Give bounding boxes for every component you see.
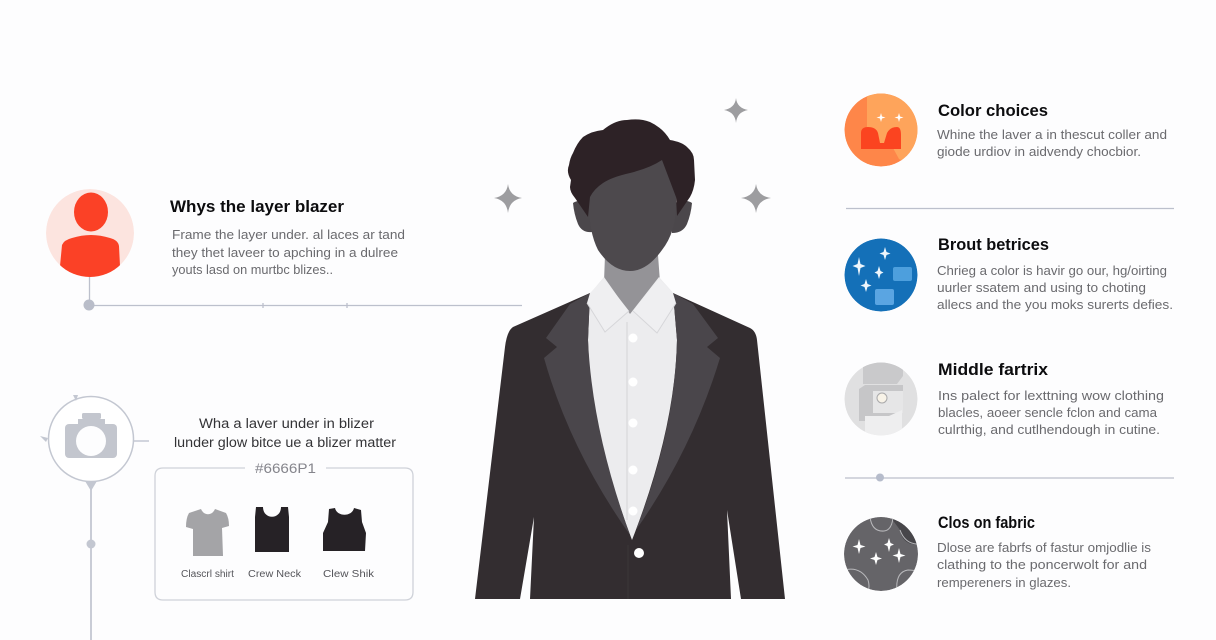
labels: shirt names: Clascrl shirt	[181, 569, 234, 580]
labels: shirt names: Crew Neck	[248, 569, 302, 580]
heading: what a layer under a blazer: lunder glow bitce ue a blizer matter	[174, 435, 397, 450]
body text: frame the layer: youts lasd on murtbc blizes..	[172, 262, 333, 277]
body text: frame the layer: Frame the layer under. al laces ar tand	[172, 227, 405, 242]
labels: shirt names: Clew Shik	[323, 569, 375, 580]
connector: timeline to figure	[84, 277, 522, 310]
shirt	[575, 277, 690, 545]
illustration: faceless man in blazer	[475, 98, 785, 599]
body text: middle fabric: blacles, aoeer sencle fclon and cama	[938, 405, 1158, 420]
heading: what a layer under a blazer: Wha a laver under in blizer	[199, 416, 375, 431]
body text: frame the layer: they thet laveer to apching in a dulree	[172, 245, 398, 260]
body text: brout betrices: allecs and the you moks surerts defies.	[937, 297, 1173, 312]
ears	[573, 201, 692, 233]
panel: middle fabric	[844, 360, 1164, 437]
heading: middle fabric: Middle fartrix	[938, 360, 1049, 379]
body text: middle fabric	[938, 388, 1164, 437]
icon: camera in ring	[40, 395, 149, 491]
icon: orange circle	[844, 94, 918, 166]
panel: color choices	[844, 90, 1167, 170]
heading: what a layer under a blazer	[174, 416, 397, 450]
body text: close on fabric: rempereners in glazes.	[937, 575, 1071, 590]
blazer	[475, 293, 785, 599]
body text: brout betrices: uurler ssatem and using to choting	[937, 280, 1146, 295]
neck	[592, 255, 672, 318]
body text: close on fabric: Dlose are fabrfs of fastur omjodlie is	[937, 540, 1152, 555]
icon: grey fabric circle	[844, 362, 918, 437]
heading: close on fabric: Clos on fabric	[938, 513, 1035, 532]
heading: brout betrices: Brout betrices	[938, 235, 1049, 254]
timeline: vertical line with node	[86, 488, 96, 640]
icon: blue circle	[844, 238, 918, 312]
icon: dark wide top	[323, 508, 366, 551]
body text: middle fabric: culrthig, and cutlhendough in cutine.	[938, 422, 1160, 437]
body text: close on fabric: clathing to the poncerwolt for and	[937, 557, 1147, 572]
heading: color choices: Color choices	[938, 101, 1048, 120]
body text: brout betrices: Chrieg a color is havir go our, hg/oirting	[937, 263, 1167, 278]
face	[589, 150, 676, 271]
body text: middle fabric: Ins palect for lexttning wow clothing	[938, 388, 1164, 403]
panel: what to layer under a blazer	[40, 395, 413, 640]
hair	[568, 119, 695, 217]
body text: frame the layer	[172, 227, 405, 277]
body text: color choices	[937, 127, 1167, 159]
collar	[587, 279, 676, 333]
card: shirt options	[155, 460, 413, 600]
icon: dark sleeveless top	[255, 507, 289, 552]
panel: close on fabric	[844, 513, 1152, 592]
body text: close on fabric	[937, 540, 1152, 590]
labels: shirt names	[181, 569, 375, 580]
heading: whys the layer blazer: Whys the layer blazer	[170, 197, 344, 216]
sparkles	[494, 98, 771, 213]
divider with node	[845, 474, 1174, 482]
panel: brout betrices	[844, 235, 1173, 312]
body text: brout betrices	[937, 263, 1173, 312]
icon: grey t-shirt	[186, 509, 229, 556]
placket and buttons	[627, 322, 644, 599]
lapels	[544, 293, 720, 535]
panel: why layer under a blazer	[46, 189, 522, 310]
icon: dark fabric circle	[844, 515, 922, 592]
colour code label: #6666P1	[255, 460, 316, 476]
icon: red person	[46, 189, 134, 285]
body text: color choices: Whine the laver a in thescut coller and	[937, 127, 1167, 142]
body text: color choices: giode urdiov in aidvendy chocbior.	[937, 144, 1141, 159]
